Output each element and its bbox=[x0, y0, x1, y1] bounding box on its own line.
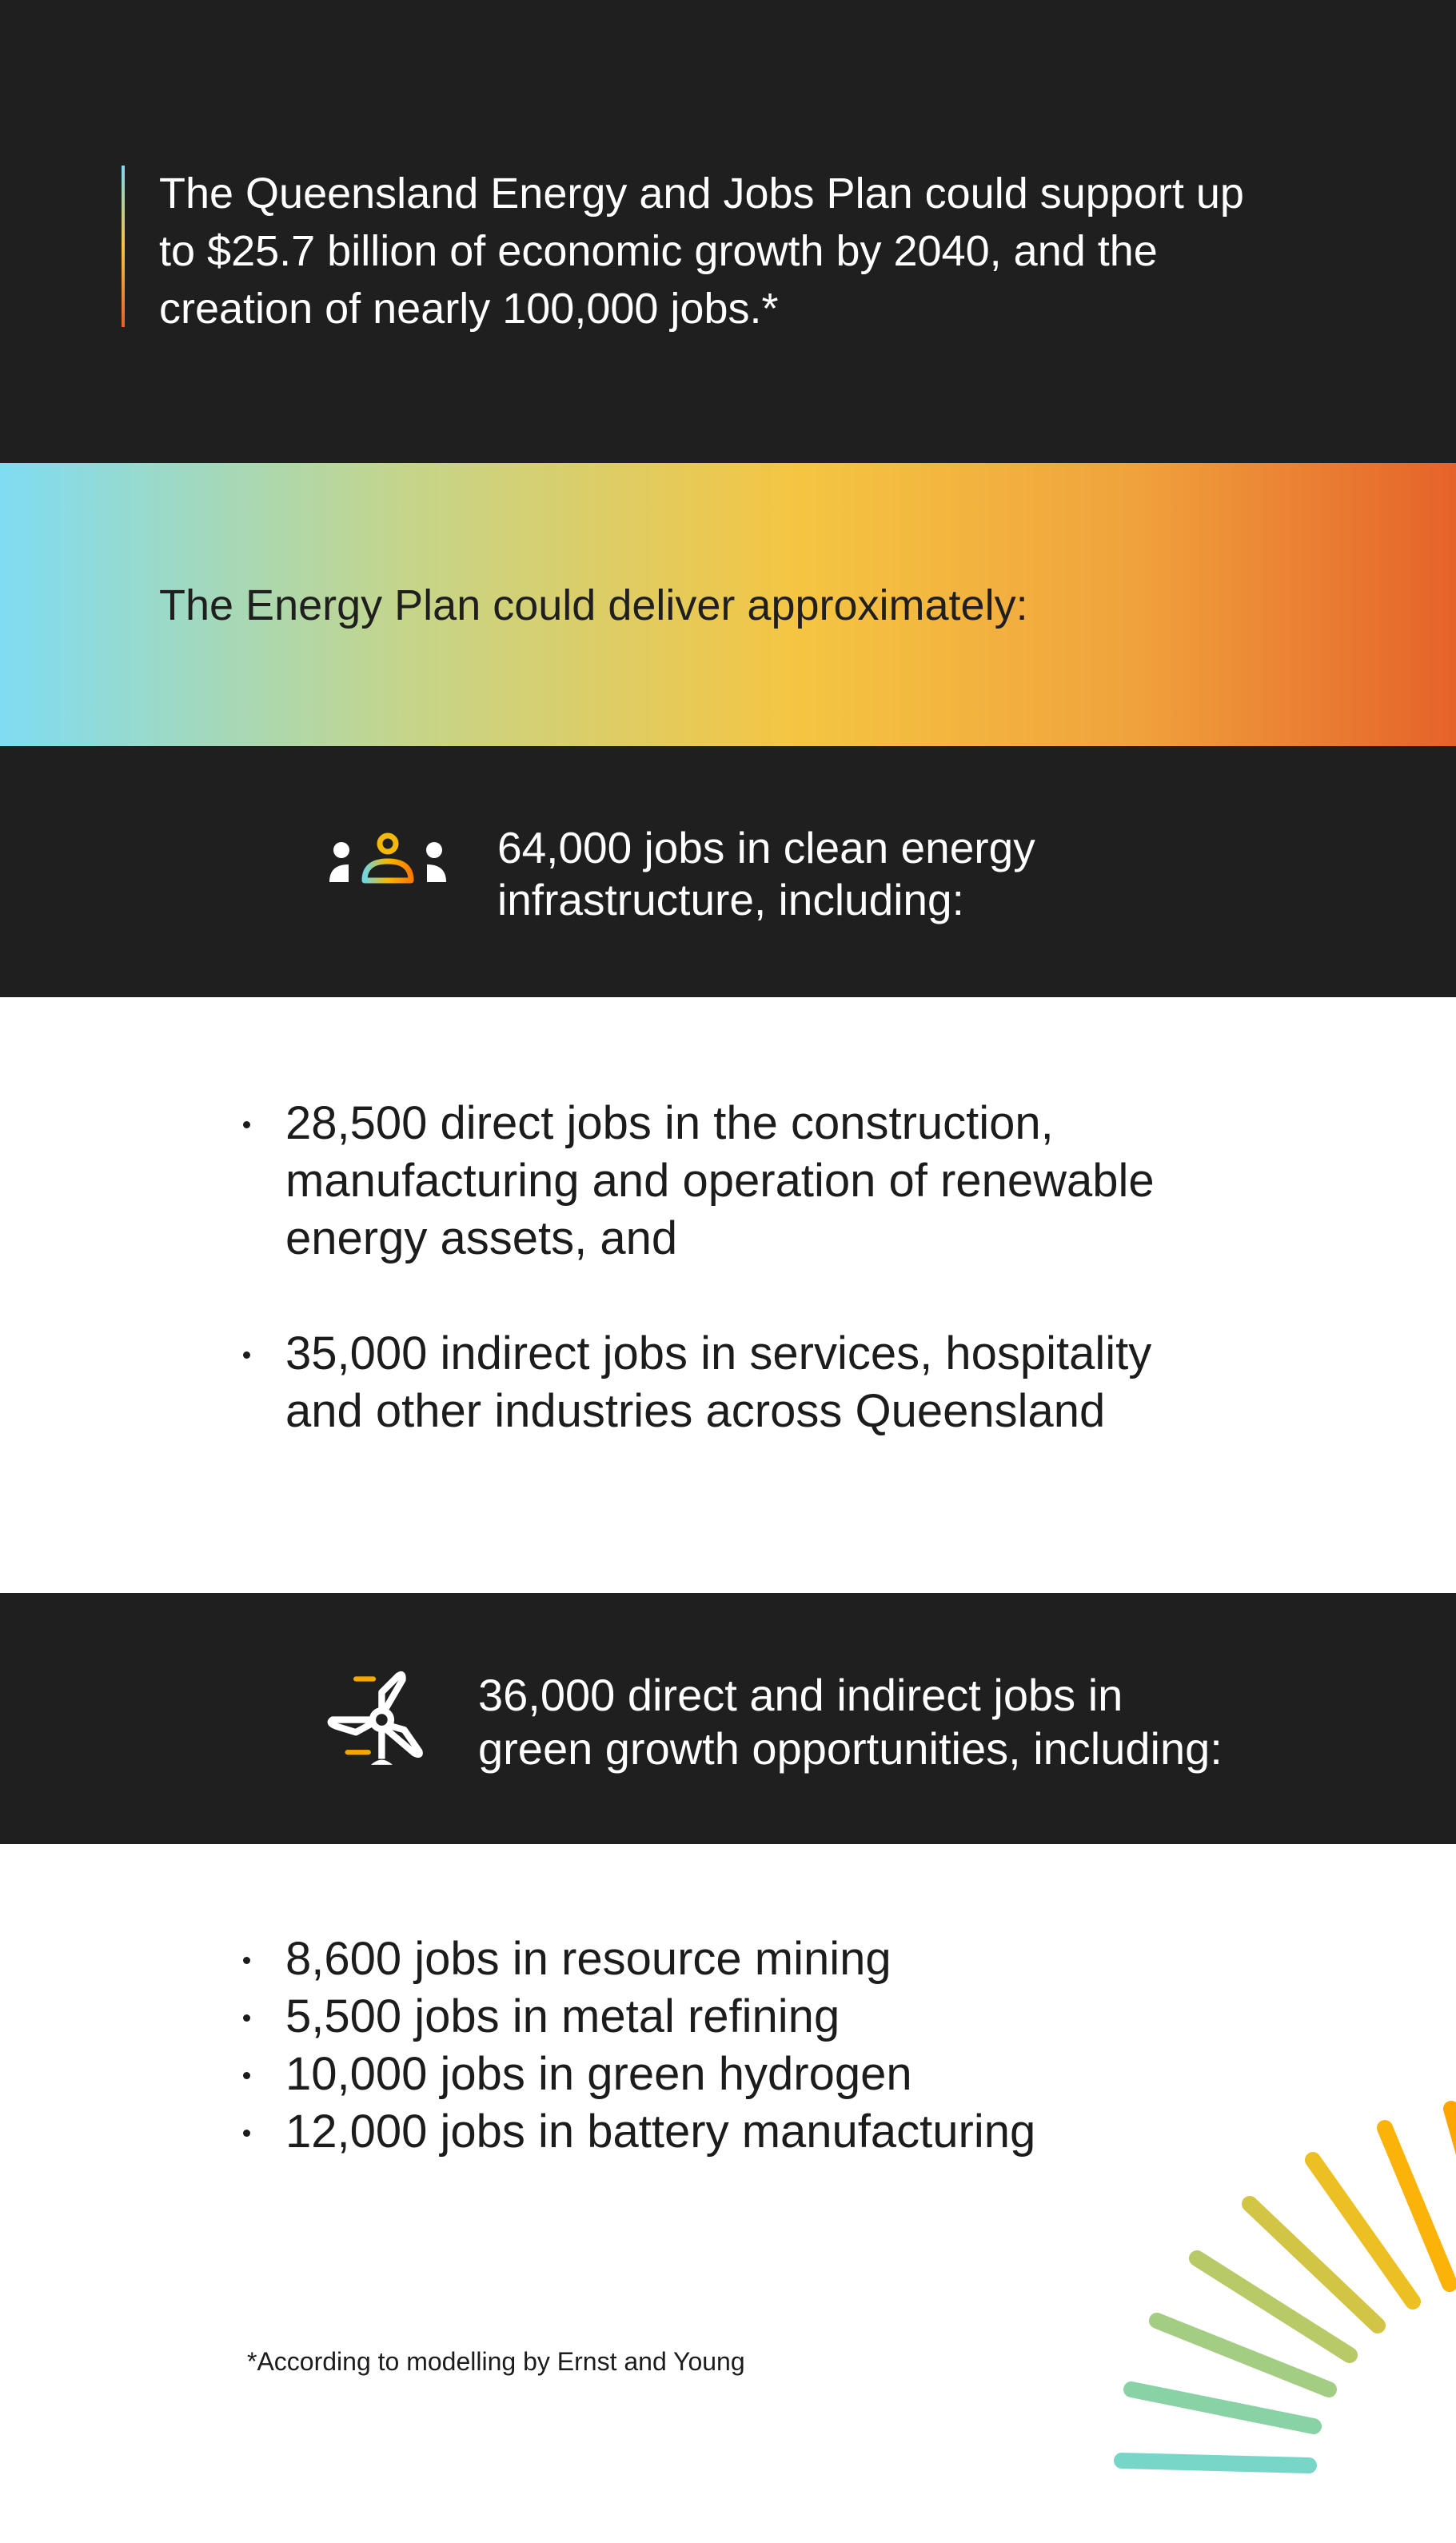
panel: clean energy jobs bbox=[0, 746, 1456, 997]
icon: people bbox=[329, 833, 446, 883]
panel: green growth bullets: 10,000 jobs in green hydrogen bbox=[285, 2048, 912, 2100]
panel: green growth jobs bbox=[0, 1593, 1456, 1844]
panel: clean energy bullets: energy assets, and bbox=[285, 1212, 677, 1264]
panel: green growth bullets: 8,600 jobs in resource mining bbox=[285, 1933, 892, 1985]
heading text: green growth opportunities, including: bbox=[478, 1723, 1223, 1774]
panel: intro dark bbox=[0, 0, 1456, 463]
panel: gradient banner bbox=[0, 463, 1456, 746]
panel: clean energy bullets: and other industries across Queensland bbox=[285, 1385, 1105, 1437]
intro text: creation of nearly 100,000 jobs.* bbox=[159, 285, 779, 333]
panel: green growth bullets: 5,500 jobs in metal refining bbox=[285, 1990, 840, 2042]
heading text: infrastructure, including: bbox=[497, 875, 964, 924]
panel: green growth bullets: 12,000 jobs in battery manufacturing bbox=[285, 2106, 1035, 2158]
panel: clean energy bullets: 35,000 indirect jobs in services, hospitality bbox=[285, 1327, 1151, 1379]
heading text: 36,000 direct and indirect jobs in bbox=[478, 1670, 1123, 1720]
heading text bbox=[478, 1670, 1223, 1774]
banner text: The Energy Plan could deliver approximately: bbox=[159, 581, 1028, 629]
icon: wind turbine bbox=[328, 1671, 423, 1765]
accent bar bbox=[122, 166, 125, 327]
panel: clean energy bullets: 28,500 direct jobs in the construction, bbox=[285, 1097, 1054, 1149]
heading text: 64,000 jobs in clean energy bbox=[497, 823, 1035, 872]
heading text bbox=[497, 823, 1035, 924]
panel: green growth bullets bbox=[243, 1933, 1035, 2158]
footnote: *According to modelling by Ernst and Young bbox=[247, 2347, 745, 2376]
panel: clean energy bullets: manufacturing and operation of renewable bbox=[285, 1155, 1155, 1207]
intro text: to $25.7 billion of economic growth by 2040, and the bbox=[159, 227, 1158, 275]
panel: clean energy bullets bbox=[243, 1097, 1155, 1437]
intro text: The Queensland Energy and Jobs Plan could support up bbox=[159, 170, 1244, 218]
intro text bbox=[159, 170, 1244, 333]
